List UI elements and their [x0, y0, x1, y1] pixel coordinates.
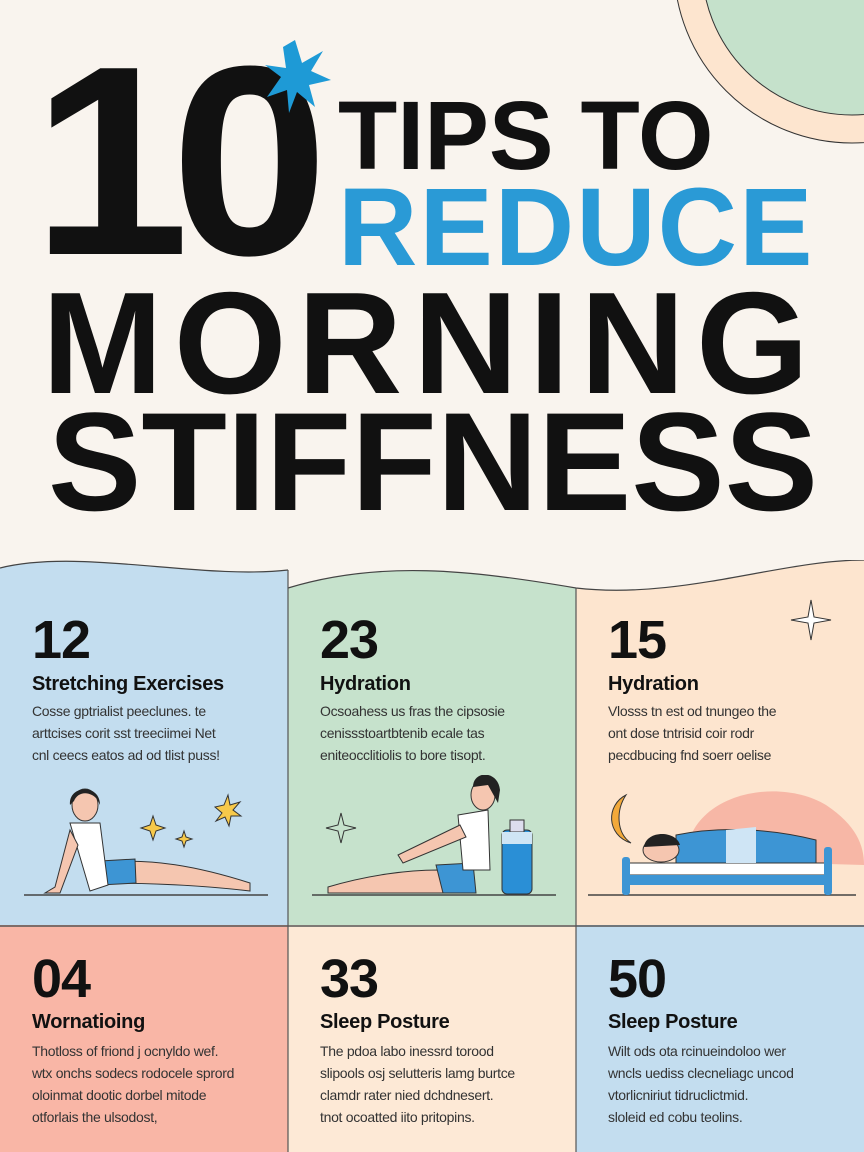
panel: 33: clamdr rater nied dchdnesert. [320, 1087, 493, 1103]
title [32, 11, 820, 540]
panel: hydration 15: pecdbucing fnd soerr oelise [608, 747, 771, 763]
panel: stretching exercises: arttcises corit sst treeciimei Net [32, 725, 216, 741]
illustration: sleeping person in bed [588, 791, 864, 896]
decorative circle [677, 0, 864, 144]
panel: 50 [608, 949, 794, 1125]
icon: blue star [265, 40, 331, 113]
panel: hydration 15: ont dose tntrisid coir rodr [608, 725, 754, 741]
panel: hydration 15: Hydration [608, 673, 699, 695]
panel: 33: tnot ocoatted iito pritopins. [320, 1109, 475, 1125]
panel: hydration 23: eniteocclitiolis to bore tisopt. [320, 747, 486, 763]
panel: stretching exercises: 12 [32, 610, 90, 670]
panel: hydration 15: 15 [608, 610, 666, 670]
panel: 50: vtorlicniriut tidruclictmid. [608, 1087, 748, 1103]
panels background [0, 560, 864, 1152]
panel: stretching exercises [24, 610, 268, 896]
panel: hydration 23: Hydration [320, 673, 411, 695]
panel: 04: 04 [32, 949, 90, 1009]
panel: 50: 50 [608, 949, 666, 1009]
panel: hydration 23: cenissstoartbtenib ecale tas [320, 725, 484, 741]
panel: stretching exercises: cnl ceecs eatos ad od tlist puss! [32, 747, 220, 763]
panel: 04: oloinmat dootic dorbel mitode [32, 1087, 206, 1103]
panel: hydration 23 [312, 610, 556, 896]
icon: sparkle [790, 600, 832, 640]
title line REDUCE: REDUCE [338, 166, 814, 289]
panel: 04: wtx onchs sodecs rodocele sprord [32, 1065, 234, 1081]
panel: stretching exercises: Stretching Exercises [32, 673, 224, 695]
panel: 04 [32, 949, 234, 1125]
title line STIFFNESS: STIFFNESS [48, 383, 818, 540]
panel: hydration 15 [588, 600, 864, 896]
panel: 50: Wilt ods ota rcinueindoloo wer [608, 1043, 786, 1059]
panel: stretching exercises: Cosse gptrialist peeclunes. te [32, 703, 206, 719]
panel: 50: Sleep Posture [608, 1011, 737, 1033]
panel: 04: Wornatioing [32, 1011, 145, 1033]
panel: 33: slipools osj selutteris lamg burtce [320, 1065, 515, 1081]
panel: 50: sloleid ed cobu teolins. [608, 1109, 742, 1125]
panel: 33: 33 [320, 949, 378, 1009]
title number 10: 10 [32, 11, 310, 312]
title line TIPS TO: TIPS TO [338, 81, 714, 190]
panel: 33: Sleep Posture [320, 1011, 449, 1033]
panel: hydration 23: Ocsoahess us fras the cipsosie [320, 703, 505, 719]
panel: hydration 15: Vlosss tn est od tnungeo the [608, 703, 776, 719]
panel: 50: wncls uediss clecneliagc uncod [608, 1065, 794, 1081]
title line MORNING: MORNING [42, 262, 820, 424]
panel: 04: otforlais the ulsodost, [32, 1109, 157, 1125]
panel: 33 [320, 949, 515, 1125]
illustration: sitting woman with bottle [312, 775, 556, 896]
panel: 04: Thotloss of friond j ocnyldo wef. [32, 1043, 218, 1059]
illustration: stretching woman [24, 788, 268, 896]
panel: 33: The pdoa labo inessrd torood [320, 1043, 494, 1059]
panel: hydration 23: 23 [320, 610, 378, 670]
